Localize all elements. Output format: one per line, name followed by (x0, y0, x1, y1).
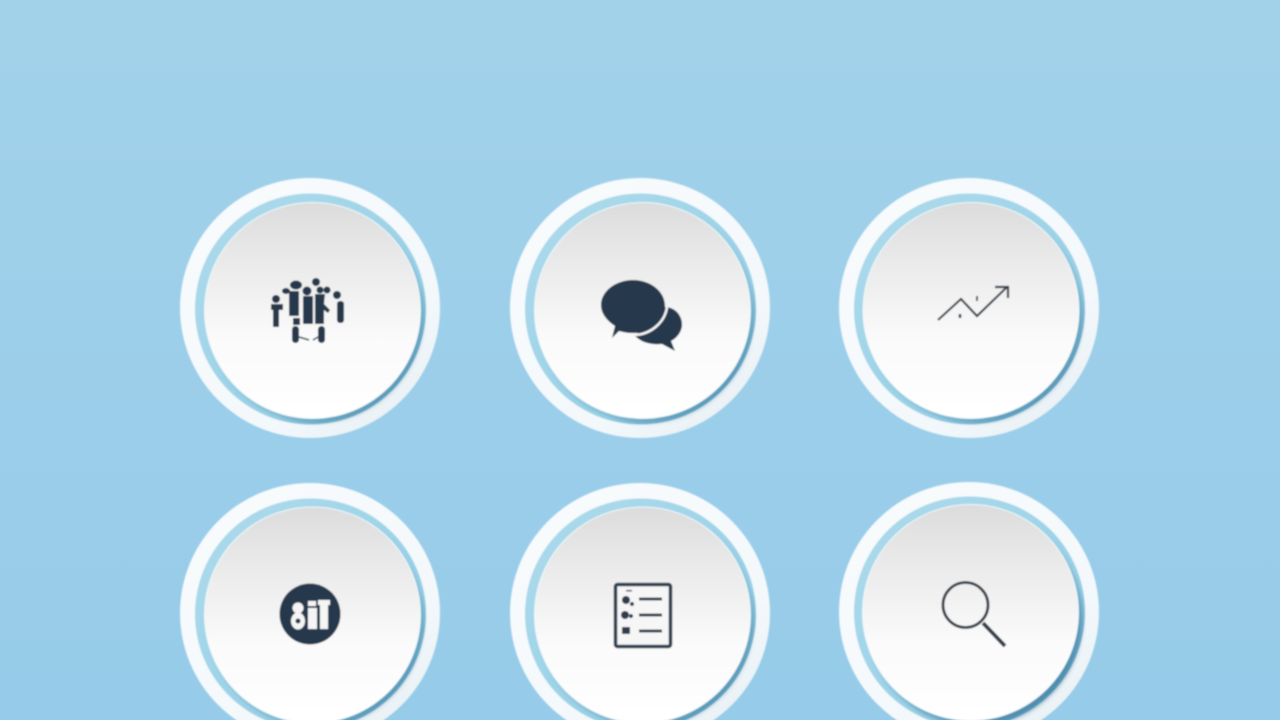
panel: checklist circle (510, 483, 770, 720)
panel: growth chart circle (839, 178, 1099, 438)
icon: magnifying glass (943, 582, 1005, 646)
icon: round badge with bars (280, 584, 340, 644)
panel: search circle (839, 482, 1099, 720)
panel: speech bubbles circle (510, 178, 770, 438)
icon: people network (271, 278, 344, 343)
icon: speech bubbles (601, 280, 682, 351)
panel: people circle (180, 178, 440, 438)
panel: bars badge circle (180, 483, 440, 720)
icon: checklist (616, 584, 670, 646)
icon: trending arrow (938, 287, 1008, 320)
